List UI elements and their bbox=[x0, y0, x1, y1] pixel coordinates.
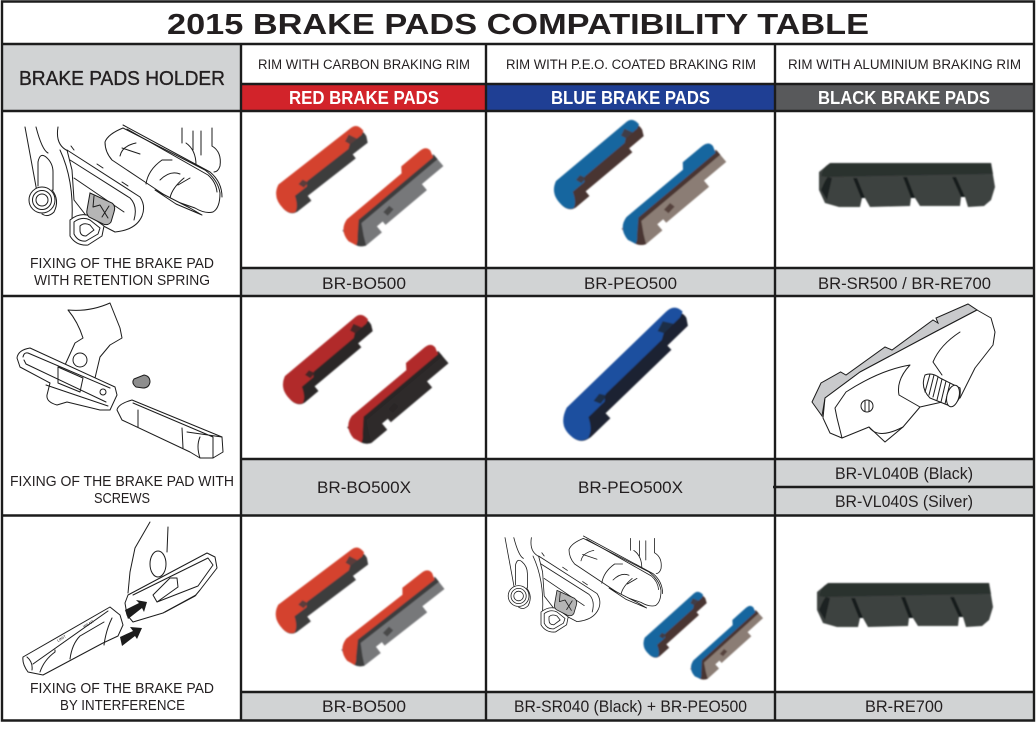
illustration: screw holder bbox=[17, 303, 223, 458]
title: 2015 BRAKE PADS COMPATIBILITY TABLE bbox=[167, 9, 869, 41]
composite: retention spring holder with blue pads bbox=[505, 536, 768, 684]
part number: BR-BO500X: BR-BO500X bbox=[317, 478, 411, 497]
heading: brake pads holder: BRAKE PADS HOLDER bbox=[19, 68, 225, 90]
band label: red brake pads: RED BRAKE PADS bbox=[289, 88, 439, 108]
header: brake pads holder panel bbox=[2, 45, 241, 111]
label: coated rim: RIM WITH P.E.O. COATED BRAKING RIM bbox=[506, 57, 756, 72]
photo: blue pad row 2 bbox=[555, 303, 701, 447]
label: carbon rim: RIM WITH CARBON BRAKING RIM bbox=[258, 57, 470, 72]
photo: black pad row 3 bbox=[817, 583, 993, 627]
caption: interference bbox=[30, 681, 214, 714]
caption: retention spring: FIXING OF THE BRAKE PAD bbox=[30, 256, 214, 272]
illustration: interference holder: WEAR bbox=[82, 620, 95, 629]
part number: BR-RE700: BR-RE700 bbox=[865, 697, 943, 716]
illustration: interference holder: LIMIT bbox=[56, 634, 67, 643]
arrow: lower bbox=[120, 627, 142, 646]
band label: black brake pads: BLACK BRAKE PADS bbox=[818, 88, 990, 108]
illustration: interference holder bbox=[23, 522, 217, 675]
part number: BR-SR040 + BR-PEO500: BR-SR040 (Black) + BR-PEO500 bbox=[514, 697, 747, 716]
photo: red pads row 1 bbox=[270, 123, 451, 252]
header: aluminium rim column bbox=[775, 57, 1034, 110]
arrow: upper bbox=[125, 600, 147, 619]
photo: red pads row 3 bbox=[269, 545, 451, 672]
illustration: pad with threaded bolt bbox=[812, 304, 995, 442]
photo: black pad row 1 bbox=[819, 163, 995, 207]
photo: red pads row 2 bbox=[276, 312, 456, 450]
caption: retention spring bbox=[30, 256, 214, 289]
part number: BR-PEO500X: BR-PEO500X bbox=[578, 478, 683, 497]
label: aluminium rim: RIM WITH ALUMINIUM BRAKING RIM bbox=[788, 57, 1021, 72]
header: carbon rim column bbox=[241, 57, 486, 110]
caption: retention spring: WITH RETENTION SPRING bbox=[34, 273, 210, 289]
part number: BR-BO500 row 1: BR-BO500 bbox=[322, 274, 406, 293]
part number: BR-VL040B: BR-VL040B (Black) bbox=[835, 464, 973, 483]
part number: BR-VL040S: BR-VL040S (Silver) bbox=[835, 492, 973, 511]
caption: interference: FIXING OF THE BRAKE PAD bbox=[30, 681, 214, 697]
caption: screws: SCREWS bbox=[94, 491, 150, 507]
part number: BR-PEO500: BR-PEO500 bbox=[584, 274, 677, 293]
illustration: retention spring holder bbox=[25, 125, 222, 245]
caption: interference: BY INTERFERENCE bbox=[60, 698, 185, 714]
photo: blue pads row 1 bbox=[547, 117, 734, 251]
part number: BR-SR500 / BR-RE700: BR-SR500 / BR-RE700 bbox=[818, 274, 991, 293]
caption: screws bbox=[10, 474, 234, 507]
part number: BR-BO500 row 3: BR-BO500 bbox=[322, 697, 406, 716]
header: coated rim column bbox=[486, 57, 775, 110]
band label: blue brake pads: BLUE BRAKE PADS bbox=[551, 88, 710, 108]
part number cell backgrounds bbox=[241, 268, 1034, 720]
caption: screws: FIXING OF THE BRAKE PAD WITH bbox=[10, 474, 234, 490]
